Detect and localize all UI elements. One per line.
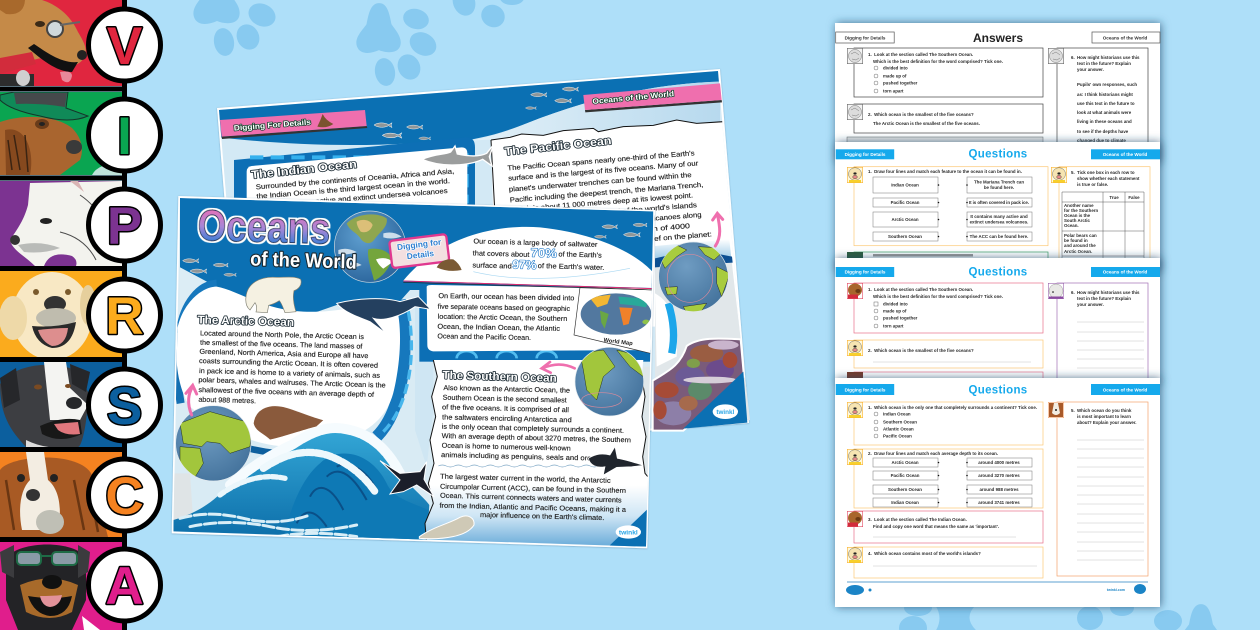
- text: Arctic Ocean body: coasts surrounding the Arctic Ocean. It is often covered: [199, 358, 378, 370]
- globe: Southern: [575, 347, 644, 416]
- question 6: as: I think historians might: [1077, 92, 1133, 97]
- tag: Oceans of the World: [1091, 267, 1160, 277]
- text: Indian Ocean body: [256, 168, 454, 201]
- heading: The Arctic Ocean: The Arctic Ocean: [197, 314, 294, 329]
- main poster: Oceans of the World: [170, 190, 657, 550]
- text: ocean facts: Our ocean is a large body of saltwater: [473, 238, 598, 249]
- heading: The Pacific Ocean: The Pacific Ocean: [504, 135, 612, 158]
- text: Pacific Ocean body: its coastline. It has an average depth of 4000: [513, 223, 690, 244]
- question 1: Which is the best definition for the word comprised? Tick one.: [873, 59, 1003, 64]
- question 2 match: Pacific Ocean: [891, 473, 920, 478]
- panel: info with swirl: [419, 283, 656, 362]
- separators: [0, 89, 122, 540]
- question 1: made up of: [883, 74, 907, 78]
- text: Antarctic Circumpolar Current: from the Indian, Atlantic and Pacific Oceans, making it a: [439, 503, 626, 514]
- band: S blue with dog: [0, 362, 122, 448]
- tag: Digging for Details: [836, 32, 894, 43]
- twinkl logo: twinkl: [619, 529, 638, 536]
- worksheet: Answers: [835, 23, 1160, 166]
- question 5 table: False: [1128, 195, 1140, 200]
- question 1: made up of: [883, 308, 907, 314]
- question 6: living in these oceans and: [1077, 119, 1132, 124]
- band: P purple with dog: [0, 181, 122, 266]
- corner triangle and twinkl logo: twinkl: [716, 409, 735, 416]
- question 1 match: [847, 167, 1048, 246]
- question 1: 1. Look at the section called The Southern Ocean.: [868, 52, 973, 57]
- letter V: [88, 9, 160, 81]
- orca: [588, 447, 643, 475]
- letter R: [88, 279, 160, 351]
- question 5 table: [1051, 167, 1150, 277]
- footer: [846, 582, 1148, 595]
- question 5 table: show whether each statement: [1077, 176, 1140, 181]
- question 5 table: be found in: [1064, 238, 1088, 243]
- tag: Digging for Details: [836, 267, 894, 277]
- text: Antarctic Circumpolar Current: Ocean. This current connects waters and water currents: [440, 493, 622, 504]
- tag: Oceans of the World: Oceans of the World: [1103, 152, 1147, 157]
- question 5 table: Polar bears can: [1064, 233, 1097, 238]
- question 2 match: around 988 metres: [979, 487, 1019, 492]
- text: Southern Ocean body: With an average depth of about 3270 metres, the Southern: [442, 433, 631, 444]
- question 2 edge: [847, 252, 1048, 270]
- question 2 match: Arctic Ocean: [891, 460, 919, 465]
- right banner: Oceans of the World: Oceans of the World: [592, 89, 675, 106]
- tag: Oceans of the World: Oceans of the World: [1103, 36, 1147, 40]
- question 6: text in the future? Explain: [1077, 61, 1131, 66]
- question 1 match: 1. Draw four lines and match each feature to the ocean it can be found in.: [868, 169, 1022, 174]
- question 1 match: It contains many active and: [970, 214, 1028, 219]
- panel: Indian Ocean: [246, 147, 468, 204]
- band: A pink with dog: [0, 542, 122, 630]
- letter S: [88, 369, 160, 441]
- text: five oceans intro: five separate oceans based on geographic: [438, 304, 571, 313]
- question 2 match: around 3741 metres: [978, 500, 1020, 505]
- corner triangle and twinkl logo: [683, 372, 747, 429]
- question 5 table: Ocean.: [1064, 223, 1079, 228]
- band: V red with dog: [0, 0, 122, 86]
- letter P: P: [107, 197, 142, 256]
- footer: twinkl.com: [1107, 588, 1125, 592]
- panel: The Southern Ocean: [425, 360, 653, 550]
- text: Pacific Ocean body: Pacific including the deepest trench, the Mariana Trench,: [510, 182, 704, 204]
- text: Southern Ocean body: the saltwaters encircling Antarctica and: [442, 414, 572, 424]
- text: Antarctic Circumpolar Current: The largest water current in the world, the Antarctic: [440, 474, 611, 485]
- text: ocean facts: surface and: [472, 262, 512, 270]
- back poster lower-right: globe, reef and logo: [653, 213, 750, 431]
- question 1 match: be found here.: [984, 185, 1014, 190]
- question 6: text in the future? Explain: [1077, 296, 1131, 301]
- question 3 edge: [847, 137, 1043, 147]
- question 1: [847, 48, 1043, 97]
- heading: The Indian Ocean: The Indian Ocean: [251, 159, 357, 182]
- question 2: [847, 340, 1043, 368]
- question 1: [847, 402, 1043, 445]
- text: Southern Ocean body: of the five oceans. It is comprised of all: [442, 404, 570, 414]
- tag: Oceans of the World: [1092, 32, 1160, 43]
- text: five oceans intro: Ocean, the Indian Ocean, the Atlantic: [437, 324, 561, 333]
- penguin: [380, 461, 434, 497]
- text: Pacific Ocean body: planet's underwater trenches can be found within the: [509, 172, 692, 194]
- text: Pacific Ocean body: metres and contains the largest coral reef on the planet:: [513, 231, 712, 254]
- text: Southern Ocean body: Southern Ocean is the second smallest: [443, 395, 567, 404]
- wave: [173, 426, 429, 547]
- question 1 match: It is often covered in pack ice.: [969, 200, 1029, 205]
- question 1: pushed together: [883, 316, 918, 320]
- question 5 table: is true or false.: [1077, 182, 1108, 187]
- question 1 match: Arctic Ocean: [891, 217, 919, 222]
- VIPERS dog strip: [0, 0, 160, 630]
- swirl around Arctic panel: [180, 284, 217, 333]
- tag: Oceans of the World: [1091, 384, 1160, 395]
- text: ocean facts: 70%: [531, 246, 557, 260]
- letter C: C: [105, 467, 144, 526]
- panel: Pacific Ocean: [491, 120, 750, 327]
- arrow: pink: [713, 213, 723, 246]
- question 6: look at what animals were: [1077, 110, 1132, 115]
- band: C orange with dog: [0, 452, 122, 537]
- question 5 table: for the Southern: [1064, 208, 1098, 213]
- question 1: Which is the best definition for the word comprised? Tick one.: [873, 294, 1003, 299]
- text: Southern Ocean body: Also known as the Antarctic Ocean, the: [443, 385, 570, 395]
- question 5 table: Another name: [1064, 203, 1094, 208]
- letter V: V: [107, 17, 142, 76]
- letter I: [88, 99, 160, 171]
- text: Arctic Ocean body: polar bears, whales and walruses. The Arctic Ocean is the: [198, 377, 386, 390]
- shark: [422, 144, 494, 166]
- question 1: torn apart: [883, 88, 904, 94]
- letter A: A: [105, 557, 144, 616]
- question 1: pushed together: [883, 80, 918, 86]
- heading: Questions: Questions: [969, 267, 1027, 279]
- question 1: divided into: [883, 66, 908, 70]
- left banner: Digging For Details: [220, 110, 367, 139]
- question 2: 2. Which ocean is the smallest of the five oceans?: [868, 112, 974, 117]
- globe: Pacific: [659, 242, 730, 313]
- text: ocean facts: of the Earth's water.: [538, 263, 604, 272]
- world map card: [574, 287, 655, 354]
- fish group: [374, 87, 578, 140]
- tag: Oceans of the World: [1091, 149, 1160, 159]
- globe: Arctic: [176, 406, 252, 481]
- question 6: How might historians use this: [1077, 55, 1140, 60]
- band: I green with dog: [0, 92, 122, 175]
- question 5 table: South Arctic: [1064, 218, 1090, 223]
- seal: [419, 516, 474, 539]
- text: Pacific Ocean body: The Pacific Ocean spans nearly one-third of the Earth's: [507, 150, 695, 172]
- text: ocean facts: 97%: [512, 257, 537, 272]
- question 2 match: [847, 449, 1043, 508]
- text: Pacific Ocean body: and many active and extinct undersea volcanoes along: [513, 212, 702, 234]
- title: Oceans of the World: Oceans: [197, 202, 331, 254]
- question 1 match: extinct undersea volcanoes.: [970, 220, 1028, 224]
- worksheet: Questions Southern Ocean: [835, 258, 1160, 383]
- fish group: [183, 223, 647, 276]
- text: Pacific Ocean body: surface and is the largest of its five oceans. Many of our: [508, 160, 699, 183]
- question 5 table: Tick one box in each row to: [1077, 170, 1135, 175]
- question 1: Pacific Ocean: [883, 434, 912, 438]
- heading: The Southern Ocean: The Southern Ocean: [442, 370, 557, 385]
- text: Arctic Ocean body: [198, 330, 386, 405]
- question 6: [1048, 283, 1148, 383]
- question 2: The Arctic Ocean is the smallest of the five oceans.: [873, 121, 980, 126]
- text: five oceans intro: location: the Arctic Ocean, the Southern: [438, 314, 568, 323]
- text: ocean facts: that covers about: [473, 250, 529, 259]
- title: Oceans of the World: of the World: [250, 248, 357, 274]
- tag: Digging for Details: [836, 384, 894, 395]
- text: Southern Ocean body: animals including as penguins, seals and orcas.: [441, 452, 601, 463]
- back poster: Indian and Pacific oceans: [216, 68, 750, 432]
- badge: Digging for Details: Digging for: [396, 237, 443, 252]
- tag: Digging for Details: Digging for Details: [845, 152, 886, 157]
- question 2 match: Indian Ocean: [891, 500, 919, 505]
- text: Indian Ocean body: It contains many active and extinct undersea volcanoes: [256, 188, 448, 210]
- question 1 match: The ACC can be found here.: [970, 234, 1028, 239]
- text: five oceans intro: On Earth, our ocean has been divided into: [438, 293, 575, 302]
- pacific lower background: [655, 258, 750, 430]
- question 5: is most important to learn: [1077, 414, 1131, 419]
- question 6: to see if the depths have: [1077, 129, 1129, 134]
- text: Arctic Ocean body: in pack ice and is home to a variety of animals, such as: [199, 368, 381, 380]
- question 4: [847, 547, 1043, 578]
- question 5: [1048, 402, 1148, 576]
- text: Arctic Ocean body: shallowest of the five oceans with an average depth of: [198, 387, 374, 399]
- text: Southern Ocean body: is the only ocean that completely surrounds a continent.: [442, 424, 624, 435]
- question 5 table: and around the: [1064, 243, 1096, 248]
- text: Indian Ocean body: Surrounded by the continents of Oceania, Africa and Asia,: [256, 168, 455, 191]
- text: ocean facts: of the Earth's: [558, 251, 602, 260]
- question 6: 6.: [1071, 290, 1075, 295]
- question 5: 5.: [1071, 408, 1075, 413]
- globe: Earth: [334, 211, 406, 282]
- right banner: Oceans of the World: [583, 83, 722, 112]
- heading: Questions: Questions: [969, 384, 1027, 396]
- tag: Digging for Details: Digging for Details: [845, 387, 886, 392]
- whale: [337, 297, 431, 334]
- text: five oceans intro: Ocean and the Pacific Ocean.: [437, 333, 531, 342]
- heading: Answers: Answers: [973, 31, 1023, 45]
- worksheet: Questions depths: [835, 378, 1160, 607]
- question 1: Indian Ocean: [883, 412, 911, 416]
- text: ocean facts: [472, 238, 604, 272]
- badge: Digging for Details: Details: [406, 248, 435, 261]
- band: R orange with dog: [0, 271, 122, 360]
- header blue: [180, 198, 653, 317]
- text: Pacific Ocean body: Alongside being home to most of the world's islands: [512, 202, 698, 224]
- question 1: 1. Which ocean is the only one that completely surrounds a continent? Tick one.: [868, 405, 1037, 410]
- arrow: pink Southern: [542, 362, 575, 373]
- question 1: divided into: [883, 302, 908, 306]
- question 5: Which ocean do you think: [1077, 408, 1132, 413]
- letter S: S: [107, 377, 142, 436]
- question 6: Pupils' own responses, such: [1077, 82, 1137, 87]
- question 3: 3. Look at the section called The Indian Ocean.: [868, 517, 967, 522]
- text: Southern Ocean body: [441, 385, 631, 463]
- question 6: your answer.: [1077, 67, 1104, 72]
- question 2 match: Southern Ocean: [888, 487, 922, 492]
- heading: Questions: Questions: [969, 149, 1027, 161]
- question 1: Atlantic Ocean: [883, 426, 914, 432]
- text: five oceans intro: [437, 293, 575, 342]
- question 5: about? Explain your answer.: [1077, 420, 1137, 425]
- text: Indian Ocean body: the Indian Ocean is the third largest ocean in the world.: [256, 178, 450, 201]
- question 1: torn apart: [883, 324, 904, 328]
- text: Pacific Ocean body: which is about 11 000 metres deep at its lowest point.: [510, 192, 693, 214]
- swirl behind Indian panel: [234, 139, 475, 205]
- question 5 table: Arctic Ocean.: [1064, 249, 1092, 254]
- question 6: use this text in the future to: [1077, 101, 1135, 106]
- question 6: changed due to climate: [1077, 138, 1126, 143]
- question 2 match: around 4000 metres: [978, 460, 1020, 465]
- tag: Digging for Details: [836, 149, 894, 159]
- question 1: 1. Look at the section called The Southern Ocean.: [868, 287, 973, 292]
- question 1 match: The Mariana Trench can: [974, 180, 1024, 184]
- question 6: [1048, 48, 1148, 166]
- question 5 table: 5.: [1071, 170, 1075, 175]
- letter R: R: [105, 287, 144, 346]
- question 5 table: True: [1109, 195, 1119, 200]
- question 1 match: Indian Ocean: [891, 182, 919, 188]
- polar bear: [246, 277, 301, 313]
- question 1 match: Southern Ocean: [888, 234, 922, 239]
- question 2 match: 2. Draw four lines and match each average depth to its ocean.: [868, 451, 998, 456]
- question 2 match: around 3270 metres: [978, 473, 1020, 478]
- question 5 table: Ocean is the: [1064, 213, 1091, 218]
- text: Antarctic Circumpolar Current: Circumpolar Current (ACC), can be found in the Southern: [440, 484, 626, 495]
- text: Antarctic Circumpolar Current: [439, 474, 626, 522]
- coral reef: [653, 339, 744, 431]
- world map card: World Map: [603, 338, 633, 347]
- letter A: [88, 549, 160, 621]
- walrus: [253, 406, 324, 440]
- question 1 match: Pacific Ocean: [891, 200, 920, 205]
- worksheet: Questions matching features: [835, 142, 1160, 277]
- letter P: [88, 189, 160, 261]
- arrow: pink Arctic: [186, 385, 197, 415]
- text: Pacific Ocean body: [507, 150, 712, 241]
- question 3: Find and copy one word that means the same as 'important'.: [873, 524, 999, 529]
- question 3 edge: [847, 372, 1043, 382]
- ellipse: ocean facts: [403, 227, 654, 290]
- question 1: [847, 283, 1043, 333]
- text: Arctic Ocean body: Located around the North Pole, the Arctic Ocean is: [200, 330, 365, 341]
- question 6: How might historians use this: [1077, 290, 1140, 295]
- pale sky between panels: [415, 303, 433, 467]
- question 1: Southern Ocean: [883, 420, 917, 424]
- question 2: 2. Which ocean is the smallest of the five oceans?: [868, 348, 974, 353]
- question 6: 6.: [1071, 55, 1075, 60]
- tag: Oceans of the World: Oceans of the World: [1103, 387, 1147, 392]
- question 3: [847, 511, 1043, 543]
- text: Arctic Ocean body: the smallest of the five oceans. The land masses of: [200, 340, 362, 351]
- top blue area: [217, 69, 720, 145]
- question 4: 4. Which ocean contains most of the world's islands?: [868, 551, 981, 556]
- letter C: [88, 459, 160, 531]
- question 2: [847, 104, 1043, 133]
- left banner: Digging For Details: Digging For Details: [233, 117, 311, 133]
- badge: Digging for Details: [389, 234, 462, 271]
- tag: Digging for Details: Digging for Details: [845, 270, 886, 275]
- panel: The Arctic Ocean: [176, 287, 400, 447]
- letter I: I: [117, 107, 132, 166]
- tag: Digging for Details: Digging for Details: [845, 36, 886, 40]
- tag: Oceans of the World: Oceans of the World: [1103, 270, 1147, 275]
- text: Southern Ocean body: Ocean is home to numerous well-known: [442, 443, 571, 453]
- text: Arctic Ocean body: Greenland, North America, Asia and Europe all have: [199, 349, 369, 360]
- text: Arctic Ocean body: about 988 metres.: [198, 397, 256, 405]
- question 6: your answer.: [1077, 302, 1104, 307]
- text: Antarctic Circumpolar Current: major influence on the Earth's climate.: [480, 512, 604, 522]
